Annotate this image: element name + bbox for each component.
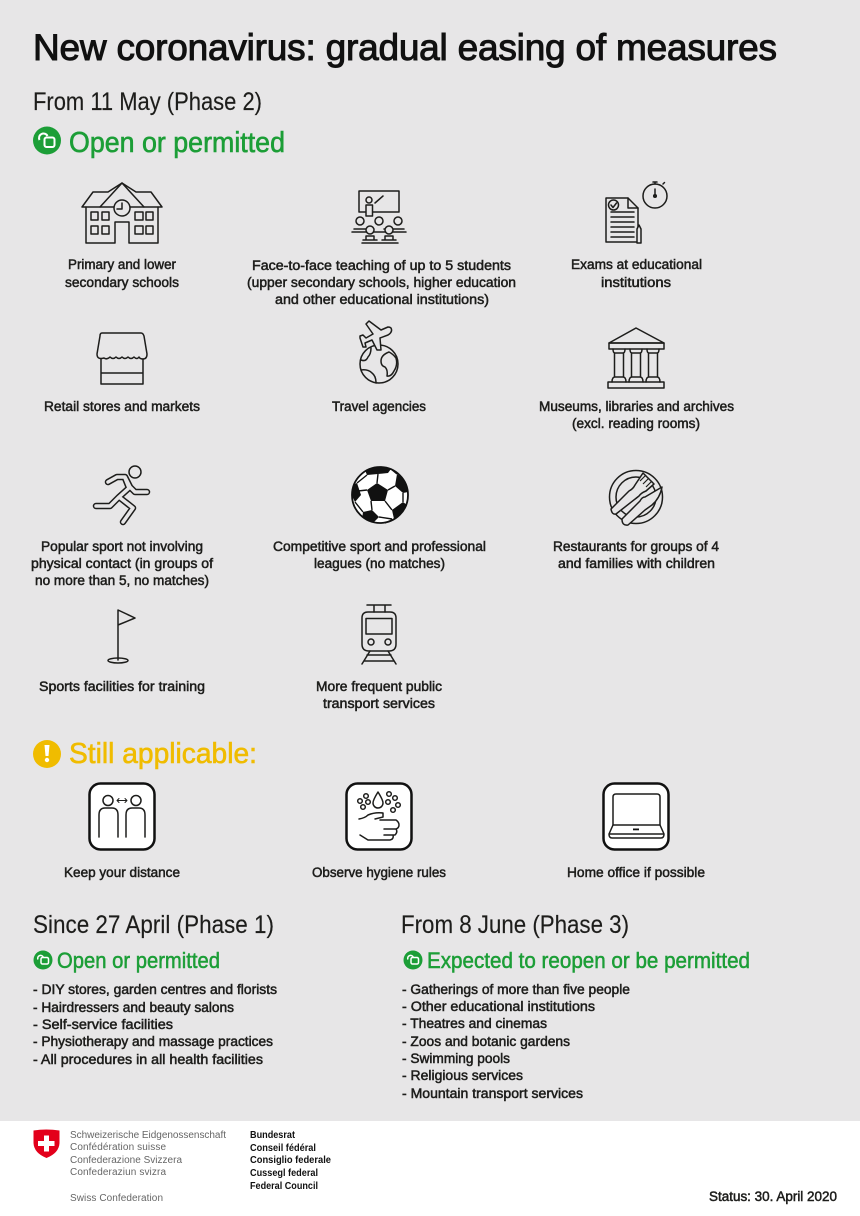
list: phase 3 items: - Gatherings of more than five people [402,982,630,997]
text: federal council names: Conseil fédéral [250,1143,316,1154]
item: popular sport [31,466,213,588]
item: retail stores: Retail stores and markets [44,399,200,414]
subheading: open or permitted: Open or permitted [57,948,220,973]
heading: open or permitted: Open or permitted [69,127,285,159]
text: confederation names [70,1130,226,1204]
item: sports facilities [39,610,205,694]
text: federal council names [250,1130,331,1192]
list: phase 1 items: - Hairdressers and beauty salons [33,1000,234,1015]
panel: phase 3 [401,911,750,1101]
item: competitive sport: leagues (no matches) [314,556,445,571]
text: status date: Status: 30. April 2020 [709,1189,837,1204]
icon: plane over globe [360,321,398,383]
item: primary schools: secondary schools [65,275,179,290]
item: keep your distance [64,784,180,880]
text: confederation names: Swiss Confederation [70,1193,163,1204]
item: public transport: transport services [323,696,435,711]
icon: school [82,183,162,243]
icon: plate with cutlery [610,470,662,525]
text: confederation names: Confederaziun svizra [70,1167,166,1178]
item: exams [571,182,702,290]
item: home office [567,784,705,880]
icon: train [362,605,396,664]
icon: runner [96,466,147,522]
item: popular sport: no more than 5, no matches) [35,573,209,588]
text: federal council names: Bundesrat [250,1130,296,1141]
item: public transport [316,605,442,711]
item: popular sport: physical contact (in groups of [31,556,213,571]
heading: since 27 April: Since 27 April (Phase 1) [33,911,274,939]
item: keep your distance: Keep your distance [64,865,180,880]
heading: from 8 June: From 8 June (Phase 3) [401,911,629,939]
footer [0,1121,860,1216]
icon: golf flag [108,610,135,663]
text: confederation names: Confederazione Svizzera [70,1155,182,1166]
list: phase 3 items: - Mountain transport services [402,1086,583,1101]
icon: green open lock [33,126,61,154]
list: phase 3 items [402,982,630,1101]
icon: hand washing [346,784,412,850]
item: face-to-face teaching: Face-to-face teaching of up to 5 students [252,258,511,273]
list: phase 1 items: - DIY stores, garden centres and florists [33,982,277,997]
panel: phase 1 [33,911,277,1067]
item: hygiene rules: Observe hygiene rules [312,865,446,880]
item: popular sport: Popular sport not involving [41,539,203,554]
list: phase 3 items: - Religious services [402,1068,523,1083]
text: federal council names: Consiglio federale [250,1155,331,1166]
list: phase 3 items: - Theatres and cinemas [402,1016,547,1031]
icon: two people apart [90,784,154,850]
text: federal council names: Cussegl federal [250,1168,318,1179]
icon: football [352,466,408,524]
icon: small green lock [404,950,422,970]
icon: yellow exclamation [33,740,61,768]
item: sports facilities: Sports facilities for training [39,679,205,694]
item: restaurants: and families with children [558,556,715,571]
icon: classroom [352,191,406,243]
heading: still applicable: Still applicable: [69,738,257,770]
title: New coronavirus: gradual easing of measures [33,27,777,68]
item: exams: Exams at educational [571,257,702,272]
item: competitive sport [273,466,486,571]
item: travel agencies: Travel agencies [332,399,426,414]
item: retail stores [44,333,200,414]
list: phase 3 items: - Swimming pools [402,1051,510,1066]
list: phase 1 items [33,982,277,1067]
text: federal council names: Federal Council [250,1181,318,1192]
icon: Swiss shield [34,1130,60,1158]
heading: phase 2: From 11 May (Phase 2) [33,88,262,116]
list: phase 3 items: - Other educational institutions [402,999,595,1014]
text: confederation names: Confédération suisse [70,1142,166,1153]
subheading: expected to reopen: Expected to reopen or be permitted [427,948,750,973]
item: restaurants: Restaurants for groups of 4 [553,539,719,554]
list: phase 1 items: - Physiotherapy and massage practices [33,1034,273,1049]
list: phase 1 items: - All procedures in all health facilities [33,1052,263,1067]
item: home office: Home office if possible [567,865,705,880]
list: phase 1 items: - Self-service facilities [33,1017,173,1032]
item: primary schools: Primary and lower [68,257,176,272]
item: face-to-face teaching [247,191,516,307]
item: competitive sport: Competitive sport and professional [273,539,486,554]
item: museums: (excl. reading rooms) [572,416,700,431]
item: travel agencies [332,321,426,414]
item: hygiene rules [312,784,446,880]
item: primary schools [65,183,179,290]
icon: museum building [608,328,664,388]
icon: shop [97,333,147,384]
icon: laptop [604,784,668,850]
item: exams: institutions [601,275,671,290]
icon: small green lock [34,950,52,970]
item: public transport: More frequent public [316,679,442,694]
item: restaurants [553,470,719,571]
list: phase 3 items: - Zoos and botanic gardens [402,1034,570,1049]
item: museums: Museums, libraries and archives [539,399,734,414]
item: museums [539,328,734,431]
text: confederation names: Schweizerische Eidgenossenschaft [70,1130,226,1141]
icon: exam paper and stopwatch [606,182,667,243]
item: face-to-face teaching: and other educational institutions) [275,292,489,307]
item: face-to-face teaching: (upper secondary schools, higher education [247,275,516,290]
